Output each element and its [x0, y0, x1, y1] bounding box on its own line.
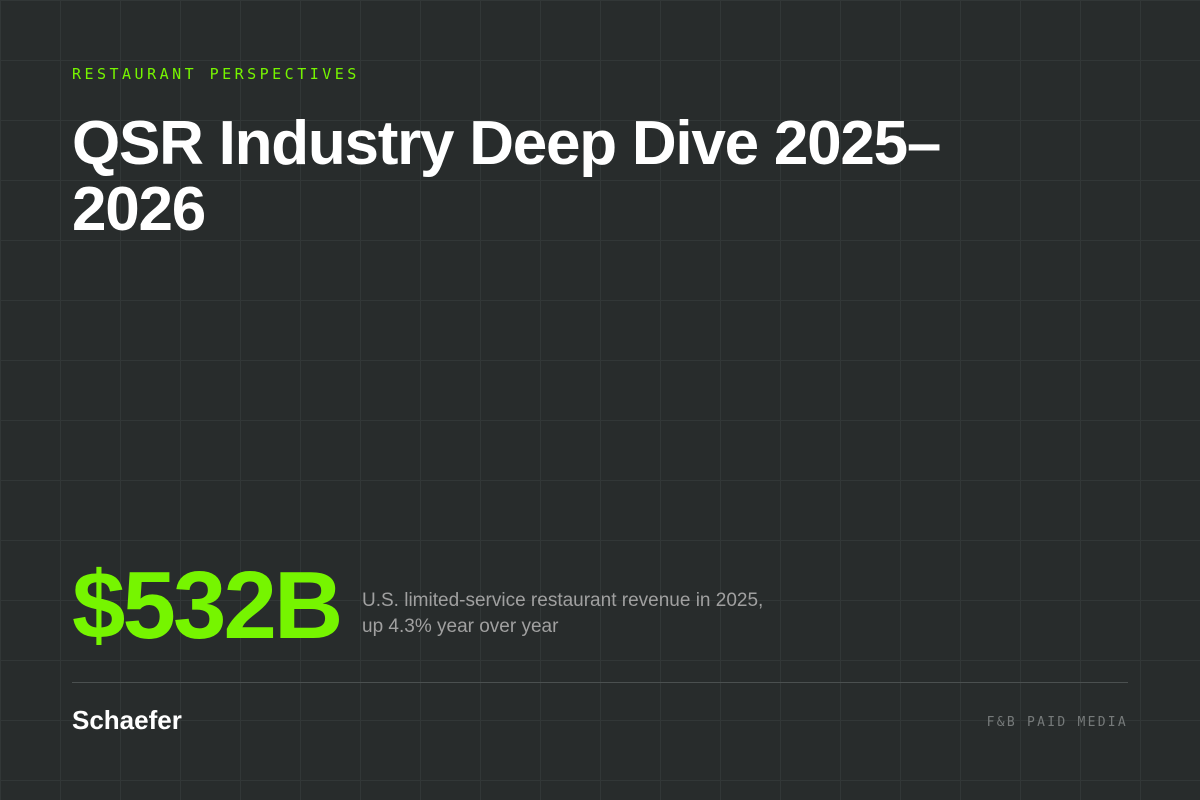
footer divider — [72, 682, 1128, 683]
statistic description: up 4.3% year over year — [362, 616, 558, 637]
eyebrow label: RESTAURANT PERSPECTIVES — [72, 65, 360, 83]
statistic description: U.S. limited-service restaurant revenue in 2025, — [362, 590, 763, 611]
title: 2026 — [72, 175, 205, 244]
statistic description — [362, 590, 763, 637]
title — [72, 109, 940, 244]
footer tag: F&B PAID MEDIA — [987, 715, 1128, 730]
key statistic: $532B — [72, 552, 340, 659]
title: QSR Industry Deep Dive 2025– — [72, 109, 940, 178]
brand name: Schaefer — [72, 705, 182, 735]
